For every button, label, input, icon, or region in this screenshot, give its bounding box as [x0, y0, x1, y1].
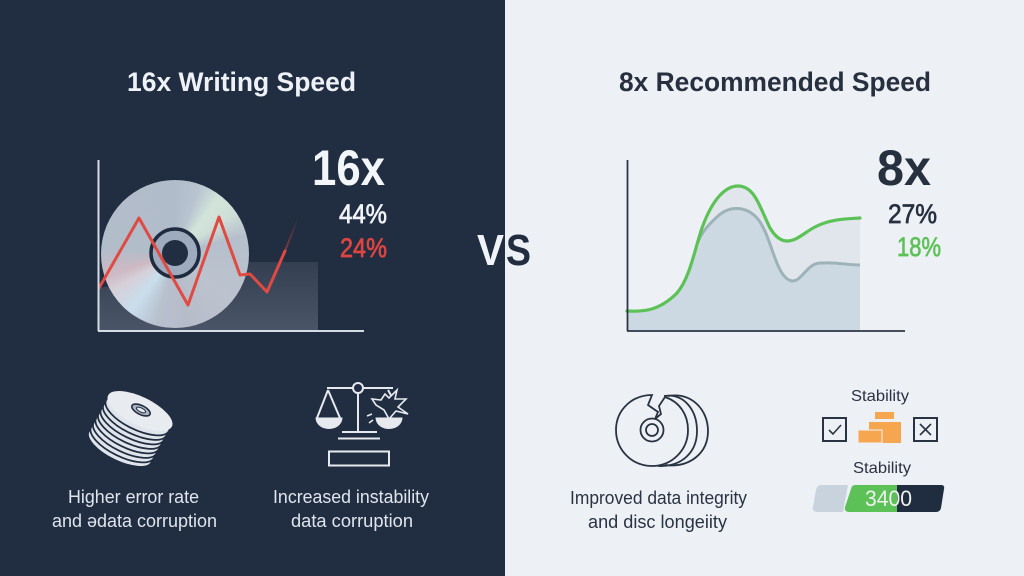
text: higher error rate: and ədata corruption	[52, 510, 217, 531]
label: stability bottom: Stability	[853, 460, 911, 477]
text: increased instability: data corruption	[291, 510, 413, 531]
vs label: V	[477, 226, 505, 275]
line: gray reference	[697, 208, 860, 281]
text: improved data integrity	[570, 487, 748, 532]
bar: stability 3400	[813, 485, 944, 512]
text: higher error rate: Higher error rate	[68, 486, 199, 507]
line: green speed	[627, 186, 860, 311]
stat: 24%: 24%	[340, 233, 387, 263]
icon: orange blocks	[858, 412, 901, 443]
stat: 18%: 18%	[897, 232, 941, 262]
heading: 8x recommended speed: 8x Recommended Speed	[619, 67, 931, 97]
icon: optical disc	[100, 179, 250, 329]
vs label: S	[506, 226, 531, 275]
panel: 8x recommended speed background	[505, 0, 1024, 576]
label: stability top: Stability	[851, 388, 909, 405]
icon: cracked discs	[616, 395, 708, 466]
text: higher error rate	[52, 486, 217, 531]
stat: 16x: 16x	[312, 140, 385, 196]
vs label	[477, 226, 531, 275]
icon: x box	[914, 418, 937, 441]
line: red error rate	[99, 217, 285, 305]
text: increased instability	[273, 486, 430, 531]
bar: stability 3400: 3400	[865, 486, 912, 511]
stat: 27%: 27%	[888, 199, 937, 229]
panel: 16x writing speed background	[0, 0, 505, 576]
text: increased instability: Increased instability	[273, 486, 430, 507]
text: improved data integrity: and disc longeiity	[588, 511, 728, 532]
icon: checkbox	[823, 418, 846, 441]
heading: 16x writing speed: 16x Writing Speed	[127, 67, 356, 97]
icon: stack of discs	[82, 383, 178, 475]
icon: scale with burst	[316, 383, 408, 466]
chart: 16x with disc and red error line	[98, 160, 364, 331]
chart: 8x stable green line	[627, 160, 905, 331]
text: improved data integrity: Improved data integrity	[570, 487, 748, 508]
stat: 8x: 8x	[877, 140, 931, 196]
stat: 44%: 44%	[339, 199, 387, 229]
